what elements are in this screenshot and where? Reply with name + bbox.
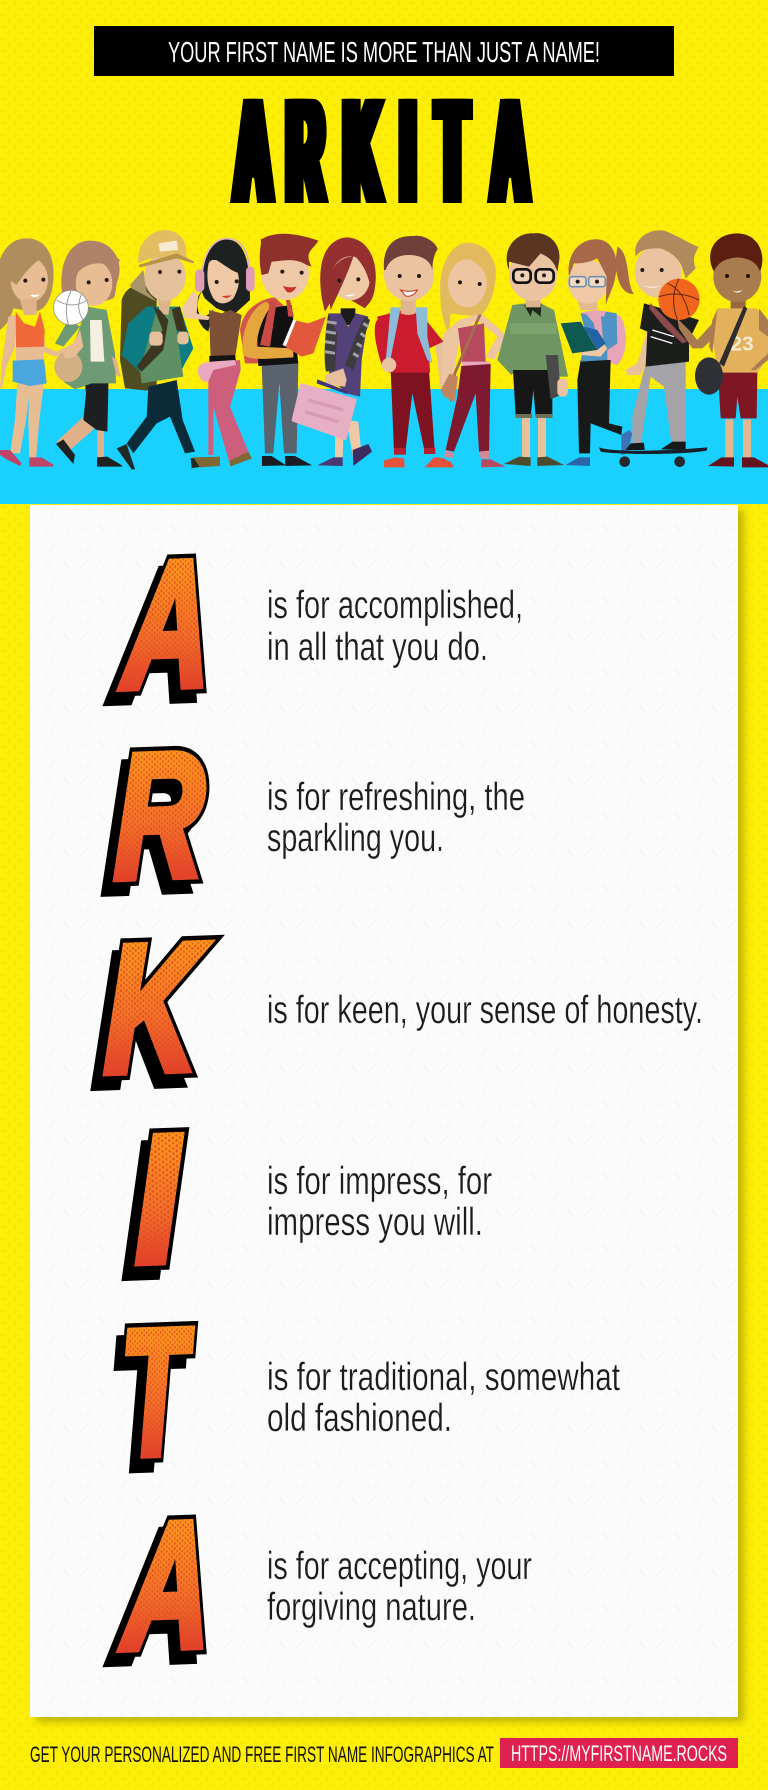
top banner xyxy=(94,26,674,76)
character: boy with glasses xyxy=(497,233,568,466)
row: letter I (impress): I xyxy=(130,1097,186,1301)
character: blonde girl xyxy=(427,243,507,467)
row: letter K (keen): K xyxy=(103,906,208,1111)
row: letter A (accepting): A xyxy=(110,1496,205,1698)
title: name: ARKITA xyxy=(240,70,533,231)
row: letter T (traditional) xyxy=(109,1292,620,1505)
row: letter K (keen) xyxy=(94,906,703,1122)
row: letter A (accomplished) xyxy=(110,524,523,737)
character: girl with pink case xyxy=(293,237,376,466)
character: boy with red backpack and book xyxy=(240,234,326,466)
row: letter A (accomplished): A xyxy=(119,524,214,726)
footer call to action: GET YOUR PERSONALIZED AND FREE FIRST NAME INFOGRAPHICS AT xyxy=(30,1742,494,1767)
row: letter T (traditional): old fashioned. xyxy=(267,1397,452,1440)
row: letter K (keen): K xyxy=(103,906,208,1111)
character: boy with tank top xyxy=(695,233,768,467)
character: boy with backpack and cap xyxy=(117,230,210,469)
character: girl in orange top xyxy=(0,238,82,467)
title: name: ARKITA xyxy=(232,70,526,231)
row: letter R (refreshing): sparkling you. xyxy=(267,817,444,860)
title: name: ARKITA xyxy=(235,70,528,231)
row: letter R (refreshing): R xyxy=(113,716,206,916)
row: letter A (accomplished): is for accomplished, xyxy=(267,584,523,627)
row: letter A (accomplished): A xyxy=(110,535,205,737)
character: girl with headphones xyxy=(182,239,255,467)
row: letter K (keen): K xyxy=(94,917,199,1122)
row: letter R (refreshing): is for refreshing, the xyxy=(267,776,525,819)
row: letter A (accepting): A xyxy=(119,1485,214,1687)
character: girl with volleyball xyxy=(54,241,122,467)
row: letter A (accepting): forgiving nature. xyxy=(267,1586,476,1629)
row: letter R (refreshing): R xyxy=(104,727,197,927)
row: letter I (impress): impress you will. xyxy=(267,1201,483,1244)
row: letter I (impress): I xyxy=(121,1108,177,1312)
row: letter R (refreshing): R xyxy=(113,716,206,916)
row: letter A (accepting): A xyxy=(119,1485,214,1687)
row: letter T (traditional): T xyxy=(118,1292,199,1494)
title: name: ARKITA xyxy=(230,70,523,231)
character: boy with tank top: 23 xyxy=(731,333,754,356)
row: letter T (traditional): T xyxy=(118,1292,199,1494)
row: letter K (keen): K xyxy=(103,906,208,1111)
character: girl with ponytail xyxy=(561,239,634,466)
row: letter A (accepting) xyxy=(110,1485,532,1698)
row: letter I (impress) xyxy=(121,1097,492,1312)
illustration: group of students, right half xyxy=(375,230,768,467)
row: letter A (accomplished): in all that you do. xyxy=(267,626,488,669)
row: letter A (accomplished): A xyxy=(119,524,214,726)
title: name: ARKITA xyxy=(237,70,531,231)
row: letter T (traditional): is for traditional, somewhat xyxy=(267,1356,620,1399)
panel: letter meanings xyxy=(30,505,744,1722)
row: letter R (refreshing) xyxy=(104,716,525,927)
row: letter A (accepting): A xyxy=(119,1485,214,1687)
row: letter A (accepting): is for accepting, your xyxy=(267,1545,532,1588)
row: letter I (impress): is for impress, for xyxy=(267,1160,492,1203)
illustration: group of students, left half xyxy=(0,230,376,469)
row: letter R (refreshing): R xyxy=(113,716,206,916)
character: skater boy with basketball xyxy=(599,230,732,467)
character: boy in red shirt xyxy=(375,236,454,467)
row: letter I (impress): I xyxy=(130,1097,186,1301)
row: letter T (traditional): T xyxy=(109,1303,190,1505)
row: letter A (accomplished): A xyxy=(119,524,214,726)
blue floor band xyxy=(0,389,768,504)
row: letter T (traditional): T xyxy=(118,1292,199,1494)
row: letter I (impress): I xyxy=(130,1097,186,1301)
